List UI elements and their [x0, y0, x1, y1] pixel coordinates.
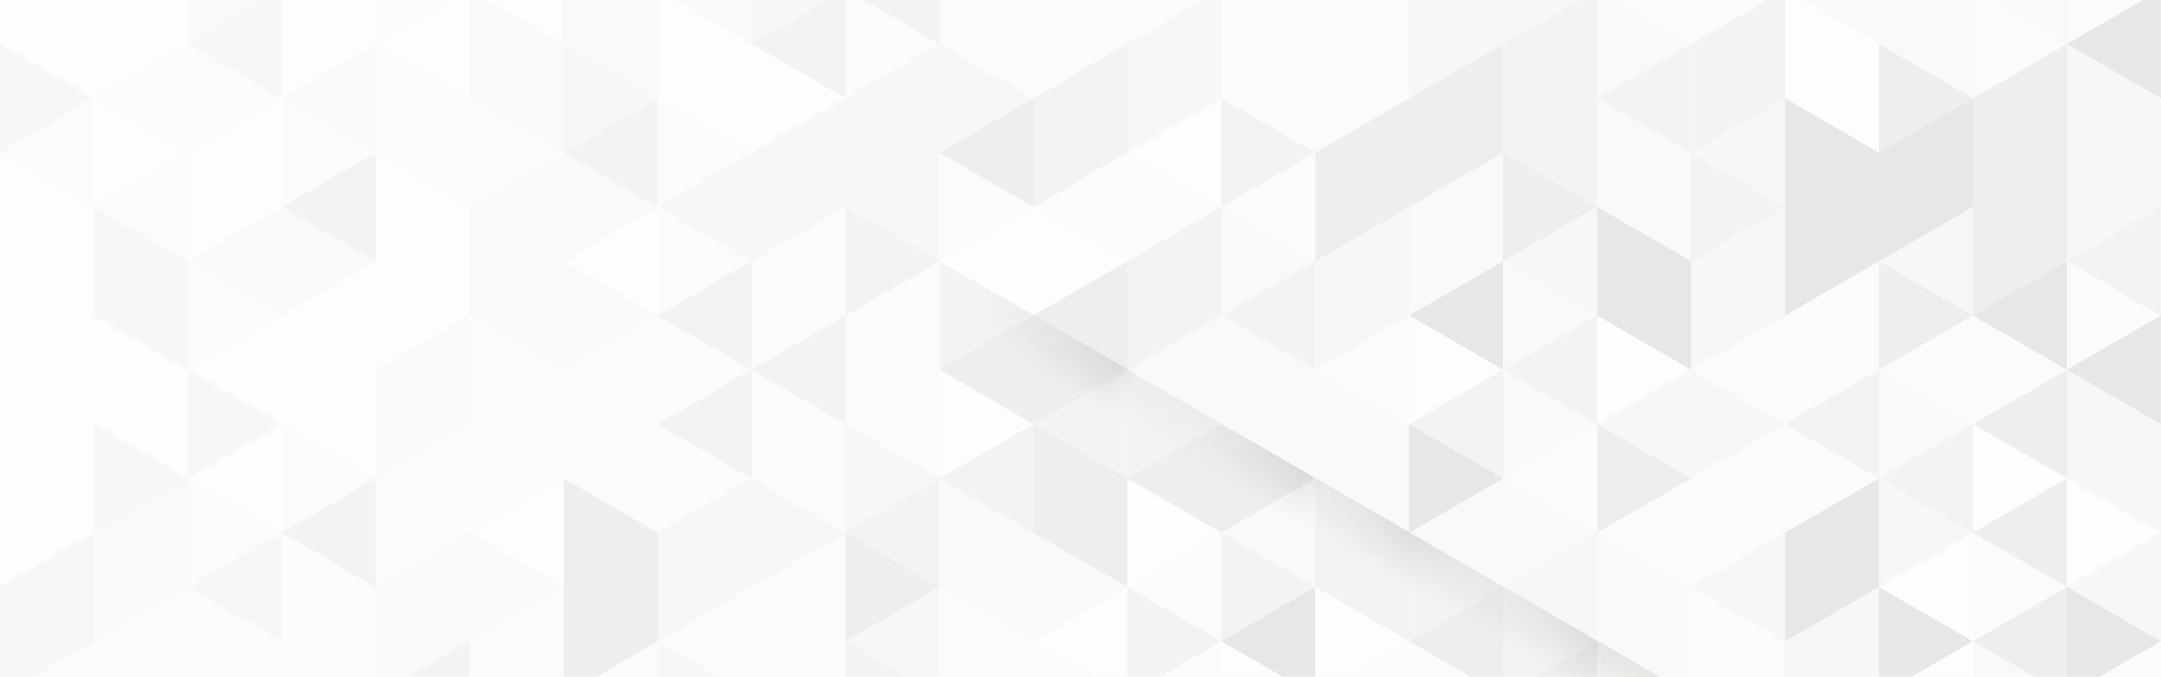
facet column 10 — [846, 0, 940, 677]
facet column 21 — [1879, 0, 1973, 677]
facet column 4 — [282, 0, 376, 587]
facet column 5 — [376, 0, 470, 677]
facet column 3 — [188, 0, 282, 641]
background: low-poly triangle mosaic — [564, 0, 2161, 677]
facet column 1 — [0, 0, 94, 677]
facet column 9 — [752, 0, 846, 587]
facet column 17 — [1503, 0, 1597, 677]
facet column 20 — [1785, 0, 1879, 677]
diagonal soft shadow — [1037, 319, 1660, 677]
facet column 2 — [94, 0, 188, 641]
facet column 22 — [1973, 0, 2067, 677]
facet column 18 — [1597, 0, 1691, 677]
facet column 19 — [1691, 0, 1785, 641]
facet column 13 — [1127, 0, 1221, 677]
facet column 23 — [2067, 0, 2161, 677]
facet column 7 — [564, 0, 658, 677]
facet column 12 — [1033, 44, 1127, 677]
facet column 8 — [658, 0, 752, 677]
facet column 16 — [1409, 0, 1503, 677]
facet column 15 — [1315, 98, 1409, 677]
facet column 11 — [940, 44, 1033, 641]
facet column 14 — [1221, 98, 1315, 677]
facet column 6 — [470, 0, 564, 641]
